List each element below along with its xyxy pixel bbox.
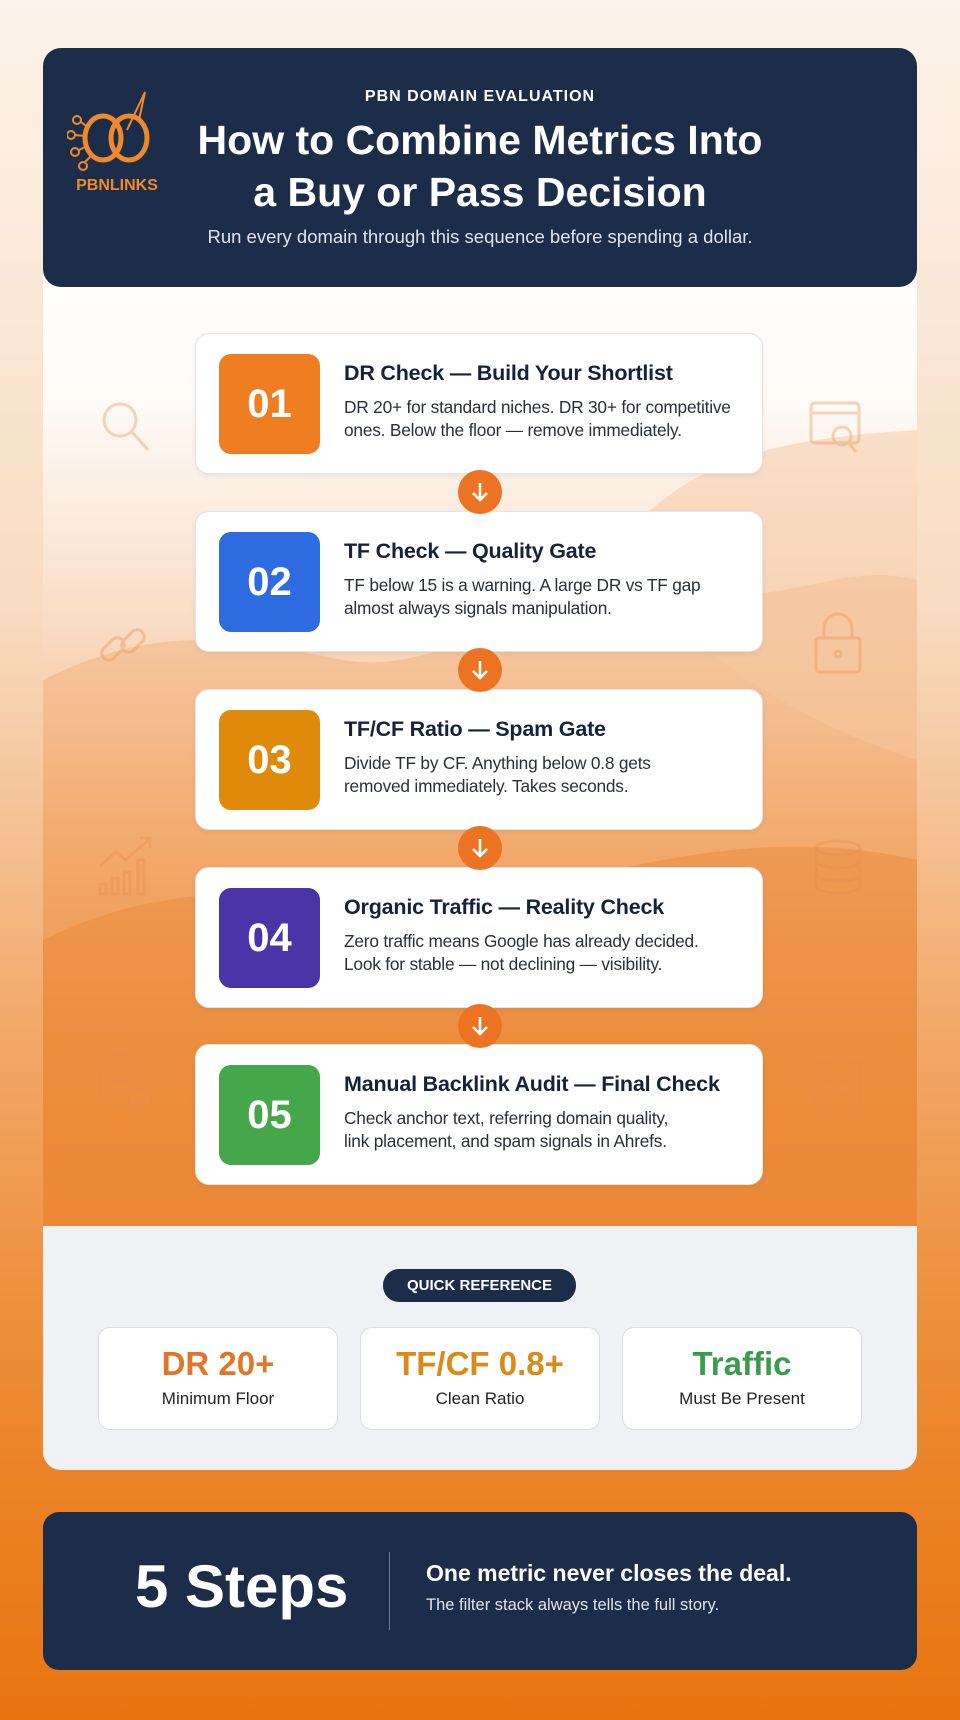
footer text: One metric never closes the deal. — [426, 1560, 792, 1586]
badge 04 — [219, 888, 320, 988]
desc 04 — [344, 931, 699, 974]
main panel — [43, 260, 917, 1226]
desc 02: almost always signals manipulation. — [344, 598, 612, 618]
title 01: DR Check — Build Your Shortlist — [344, 361, 673, 385]
icon: lock — [814, 612, 862, 674]
title 05: Manual Backlink Audit — Final Check — [344, 1072, 720, 1096]
quick reference pill — [383, 1269, 576, 1302]
quick box: Traffic — [622, 1327, 862, 1430]
title — [198, 117, 762, 215]
icon: clipboard — [812, 1054, 868, 1123]
quick box: DR — [98, 1327, 338, 1430]
badge 05 — [219, 1065, 320, 1165]
subtitle: Run every domain through this sequence before spending a dollar. — [207, 226, 753, 247]
desc 01: ones. Below the floor — remove immediately. — [344, 420, 682, 440]
logo — [67, 92, 158, 194]
quick reference panel — [43, 1226, 917, 1470]
quick box: DR: Minimum Floor — [162, 1389, 274, 1408]
desc 05 — [344, 1108, 668, 1151]
desc 02: TF below 15 is a warning. A large DR vs TF gap — [344, 575, 700, 595]
icon: database — [815, 840, 862, 850]
quick box: TF/CF: TF/CF 0.8+ — [396, 1345, 564, 1382]
title: How to Combine Metrics Into — [198, 117, 762, 163]
footer text — [426, 1560, 792, 1614]
big stat: 5 Steps — [135, 1553, 348, 1620]
header panel — [43, 48, 917, 287]
desc 02 — [344, 575, 700, 618]
badge 01 — [219, 354, 320, 454]
title 04: Organic Traffic — Reality Check — [344, 895, 664, 919]
arrow 3 — [458, 826, 502, 870]
title: a Buy or Pass Decision — [253, 169, 707, 215]
card 04 — [195, 867, 763, 1008]
desc 01 — [344, 397, 731, 440]
title 03: TF/CF Ratio — Spam Gate — [344, 717, 606, 741]
desc 01: DR 20+ for standard niches. DR 30+ for competitive — [344, 397, 731, 417]
quick reference pill: QUICK REFERENCE — [407, 1277, 552, 1294]
card 02 — [195, 511, 763, 652]
quick box: TF/CF — [360, 1327, 600, 1430]
desc 04: Look for stable — not declining — visibility. — [344, 954, 662, 974]
desc 03 — [344, 753, 651, 796]
icon: chart — [98, 836, 152, 896]
quick box: Traffic: Traffic — [692, 1345, 792, 1382]
badge 02 — [219, 532, 320, 632]
desc 03: Divide TF by CF. Anything below 0.8 gets — [344, 753, 651, 773]
card 01 — [195, 333, 763, 474]
logo: PBNLINKS — [76, 177, 158, 194]
badge 05: 05 — [247, 1092, 292, 1136]
arrow 2 — [458, 648, 502, 692]
badge 01: 01 — [247, 382, 292, 426]
icon: database check — [96, 1052, 156, 1121]
icon: link — [100, 628, 146, 662]
quick box: Traffic: Must Be Present — [679, 1389, 805, 1408]
desc 05: Check anchor text, referring domain quality, — [344, 1108, 668, 1128]
footer panel — [43, 1512, 917, 1670]
badge 02: 02 — [247, 560, 292, 604]
badge 04: 04 — [247, 916, 292, 960]
card 03 — [195, 689, 763, 830]
footer text: The filter stack always tells the full story. — [426, 1596, 719, 1614]
eyebrow: PBN DOMAIN EVALUATION — [365, 88, 595, 105]
desc 04: Zero traffic means Google has already decided. — [344, 931, 699, 951]
quick box: DR: DR 20+ — [162, 1345, 274, 1382]
icon: search — [102, 402, 149, 451]
title 02: TF Check — Quality Gate — [344, 539, 596, 563]
quick box: TF/CF: Clean Ratio — [436, 1389, 524, 1408]
icon: browser search — [810, 402, 860, 453]
card 05 — [195, 1044, 763, 1185]
desc 05: link placement, and spam signals in Ahrefs. — [344, 1131, 667, 1151]
arrow 1 — [458, 470, 502, 514]
arrow 4 — [458, 1004, 502, 1048]
badge 03 — [219, 710, 320, 810]
desc 03: removed immediately. Takes seconds. — [344, 776, 628, 796]
badge 03: 03 — [247, 738, 292, 782]
